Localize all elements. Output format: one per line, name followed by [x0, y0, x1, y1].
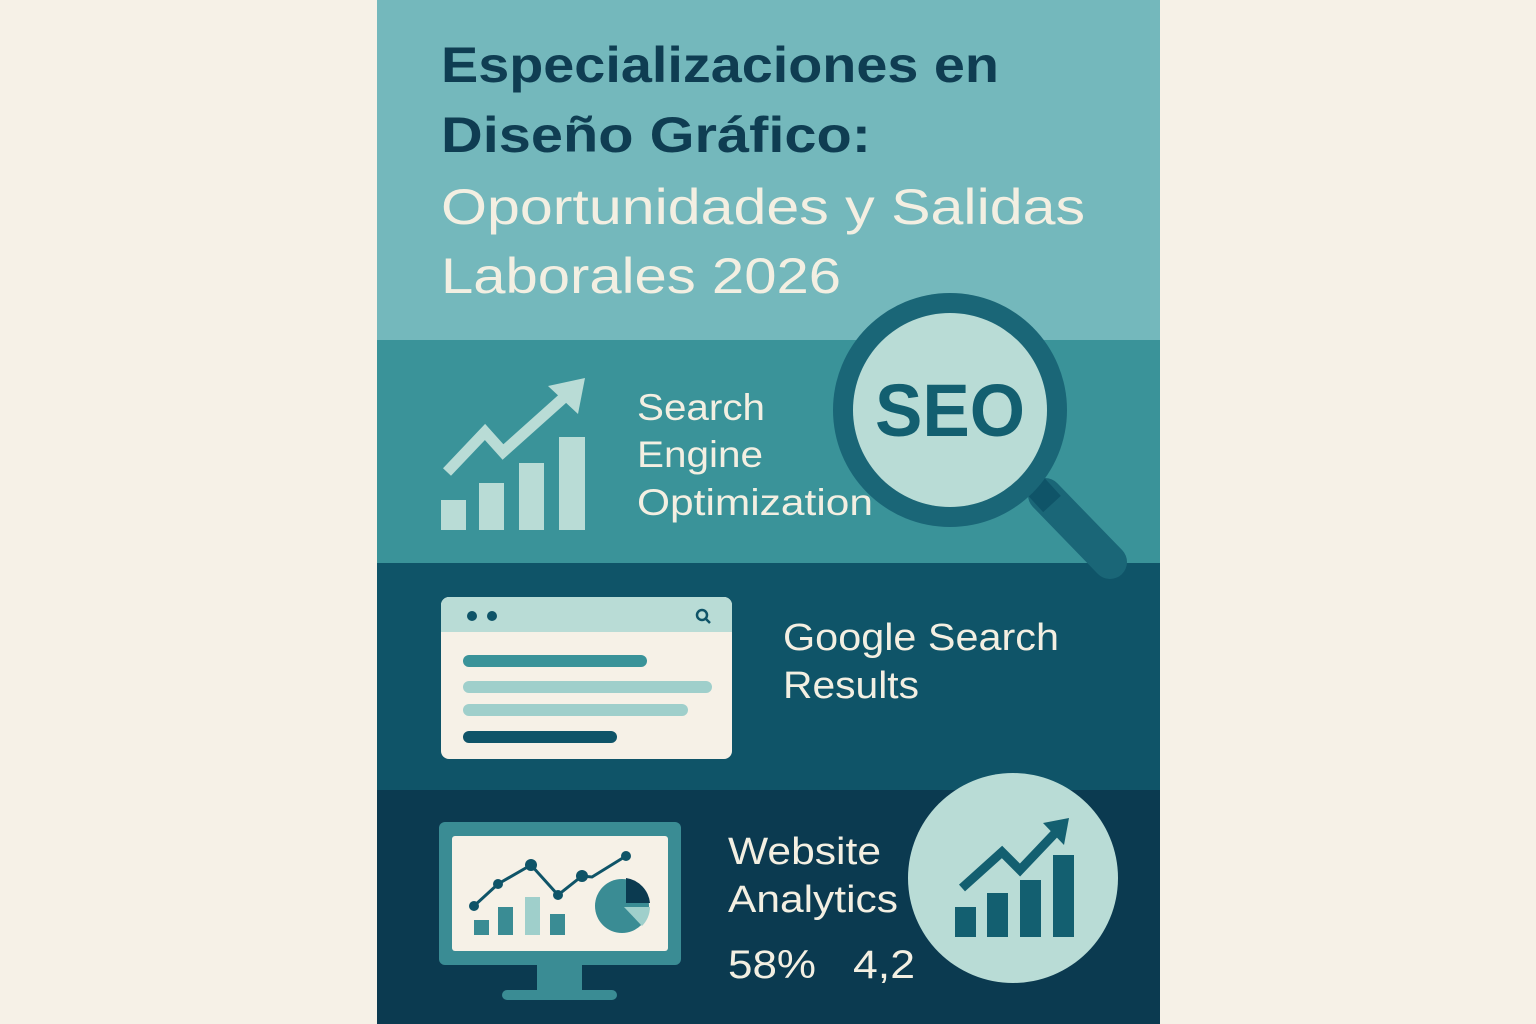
icon: browser window — [441, 597, 732, 759]
subtitle: Oportunidades y Salidas — [441, 179, 1085, 235]
icon: analytics circle — [908, 773, 1118, 983]
text: search engine optimization: Optimization — [637, 482, 873, 523]
panel: SEO — [377, 340, 1160, 563]
text: search engine optimization — [637, 387, 873, 523]
text: google search results: Results — [783, 665, 919, 707]
text: google search results: Google Search — [783, 617, 1059, 659]
text: website analytics: Analytics — [728, 879, 898, 921]
panel: website analytics — [377, 773, 1160, 1024]
title: Especializaciones en — [441, 37, 999, 93]
title — [441, 37, 999, 163]
text: search engine optimization: Search — [637, 387, 765, 428]
text: website analytics: Website — [728, 831, 881, 873]
text: website analytics: 4,2 — [853, 943, 915, 987]
icon: magnifier SEO — [833, 293, 1110, 562]
panel: google search results — [377, 563, 1160, 790]
icon: monitor — [439, 822, 681, 1000]
subtitle: Laborales 2026 — [441, 248, 841, 304]
subtitle — [441, 179, 1085, 304]
text: website analytics: 58% — [728, 943, 816, 987]
text: search engine optimization: Engine — [637, 434, 763, 475]
title: Diseño Gráfico: — [441, 107, 871, 163]
icon: magnifier SEO: SEO — [875, 369, 1025, 452]
text: website analytics — [728, 831, 915, 987]
icon: growth chart — [441, 378, 585, 530]
text: google search results — [783, 617, 1059, 707]
panel: header — [377, 0, 1160, 340]
